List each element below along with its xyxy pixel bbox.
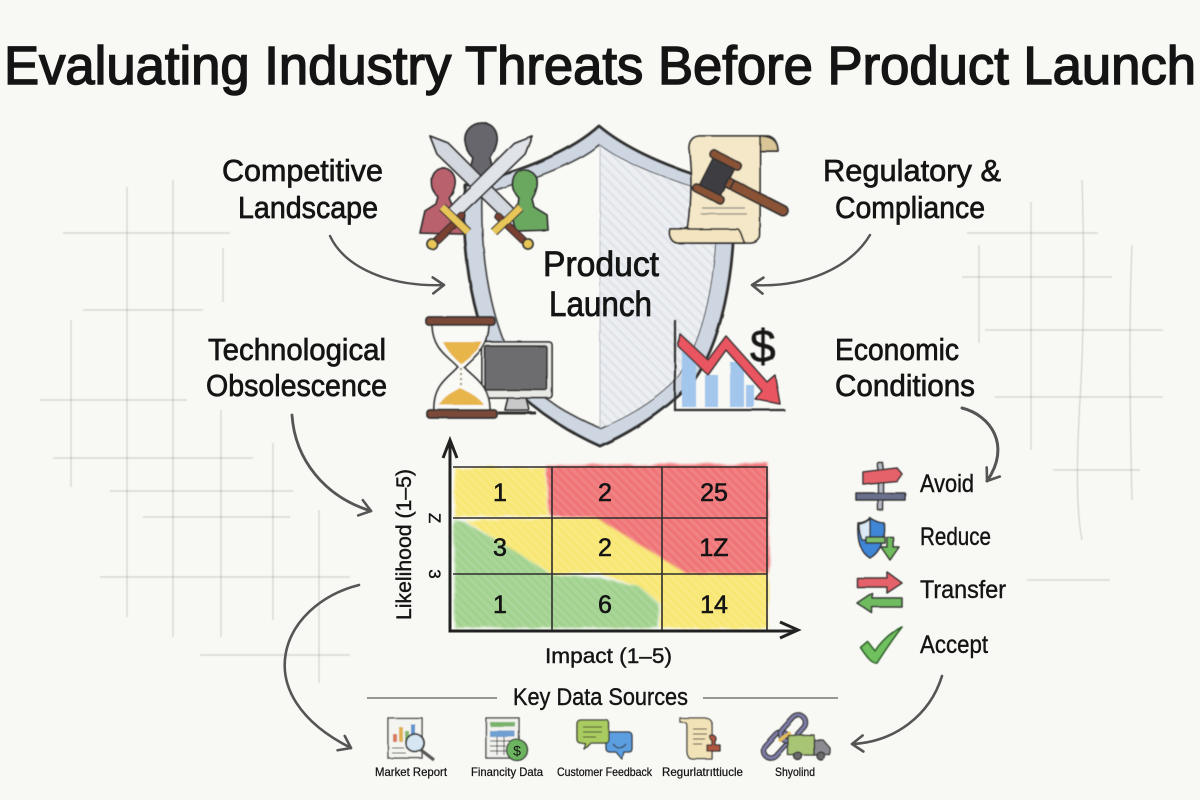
source: financial data: [471, 718, 543, 779]
shield label: Product: [543, 245, 659, 284]
text: reduce: Reduce: [920, 523, 991, 551]
arrow: technology to matrix: [292, 415, 371, 511]
icon: falling chart with dollar: [675, 320, 785, 410]
label: regulatory and compliance: Regulatory &: [823, 153, 1001, 188]
matrix values: [493, 479, 729, 619]
shield label: [543, 245, 659, 324]
arrow: regulatory to shield: [752, 235, 870, 285]
y axis label: Likelihood (1–5): [393, 469, 416, 620]
hourglass: [426, 317, 497, 418]
strategy list: [856, 463, 1006, 663]
source: customer feedback: Customer Feedback: [557, 765, 653, 779]
monitor: [482, 342, 552, 413]
y axis ticks: [425, 513, 444, 579]
y axis ticks: Z: [425, 513, 444, 523]
source: supply chain: [760, 712, 830, 779]
source: regulatory: [662, 718, 743, 779]
grey rival figure: [462, 123, 502, 198]
arrow: matrix to data sources: [285, 585, 359, 748]
label: competitive landscape: Competitive: [222, 153, 383, 188]
text: avoid: Avoid: [920, 470, 974, 498]
label: economic conditions: [835, 332, 975, 403]
label: technological obsolescence: [206, 332, 387, 403]
arrow: competitive to shield: [330, 236, 444, 285]
matrix values: 25: [700, 479, 728, 507]
source: regulatory: Regurlatrıttiucle: [662, 765, 743, 779]
matrix axes: [450, 442, 796, 631]
sword two: [448, 136, 532, 219]
label: regulatory and compliance: [823, 153, 1001, 225]
icon: reduce shield: [858, 518, 899, 560]
arrow: strategies to data sources: [852, 676, 942, 744]
label: competitive landscape: [222, 153, 383, 225]
source: market report: Market Report: [375, 765, 448, 779]
gavel: [691, 149, 798, 233]
icon: accept check: [860, 627, 902, 663]
arrow: economic to strategies: [962, 408, 998, 481]
label: technological obsolescence: Technological: [208, 332, 386, 367]
label: technological obsolescence: Obsolescence: [206, 368, 387, 403]
matrix values: 2: [598, 479, 612, 507]
icon: transfer arrows: [857, 572, 902, 613]
x axis label: Impact (1–5): [545, 645, 672, 668]
icon: scroll and gavel: [669, 136, 798, 243]
matrix values: 1: [493, 591, 507, 619]
source: market report: [375, 718, 448, 779]
matrix values: 1Z: [699, 534, 729, 562]
shield label: Launch: [549, 285, 652, 324]
matrix values: 6: [598, 591, 612, 619]
icon: avoid signpost: [856, 463, 905, 510]
sword one: [430, 136, 514, 219]
icon: falling chart with dollar: $: [750, 320, 776, 372]
shield: product launch: [464, 126, 734, 446]
label: economic conditions: Conditions: [835, 368, 975, 403]
green rival figure: [510, 170, 548, 231]
source: customer feedback: [557, 720, 653, 779]
text: accept: Accept: [920, 631, 988, 659]
label: competitive landscape: Landscape: [238, 190, 378, 225]
source: supply chain: Shyolind: [775, 765, 815, 779]
title: Evaluating Industry Threats Before Product Launch: [4, 36, 1196, 96]
key data sources section: [367, 684, 838, 779]
text: transfer: Transfer: [920, 576, 1006, 604]
icon: rivals and crossed swords: [420, 123, 548, 249]
label: regulatory and compliance: Compliance: [835, 190, 985, 225]
risk matrix: [393, 440, 798, 668]
red rival figure: [420, 168, 463, 234]
matrix values: 3: [493, 534, 507, 562]
matrix values: 2: [598, 534, 612, 562]
matrix grid: [453, 467, 767, 630]
section heading: Key Data Sources: [513, 684, 688, 711]
matrix colour zones: [453, 463, 769, 630]
y axis ticks: 3: [425, 569, 444, 579]
matrix values: 14: [700, 591, 728, 619]
source: financial data: Financity Data: [471, 765, 543, 779]
matrix values: 1: [493, 479, 507, 507]
label: economic conditions: Economic: [835, 332, 959, 367]
icon: hourglass and monitor: [426, 317, 552, 418]
source: financial data: $: [513, 742, 521, 758]
